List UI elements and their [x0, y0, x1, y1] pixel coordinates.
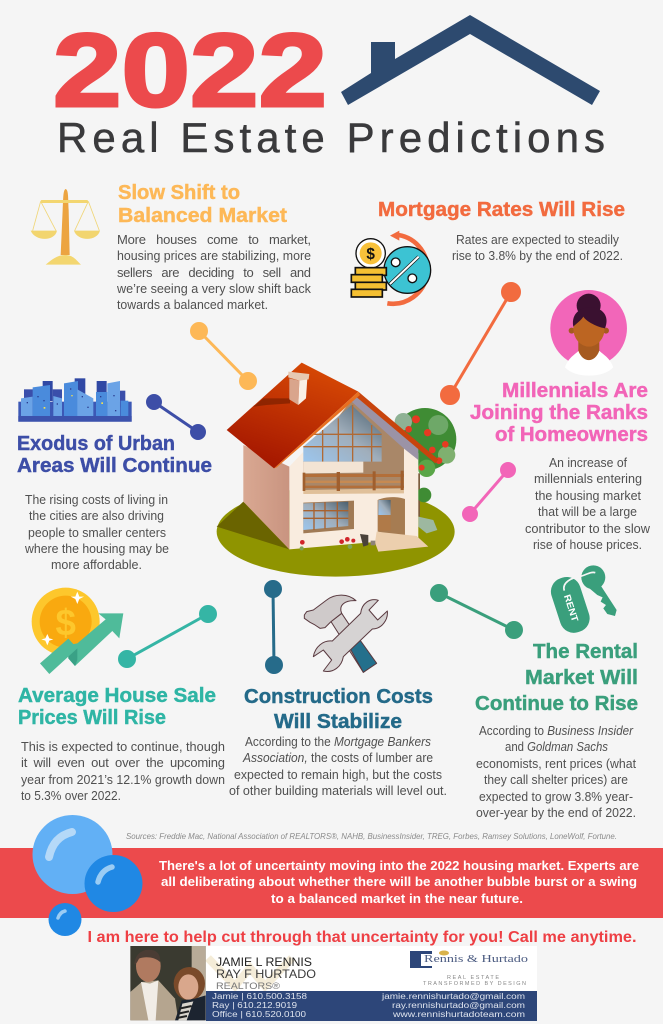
heading: Continue to Rise: [475, 692, 638, 715]
heading: Prices Will Rise: [18, 706, 166, 729]
heading: Areas Will Continue: [17, 454, 212, 477]
connector: pink: [462, 462, 516, 522]
chimney: [288, 372, 309, 405]
icon: percent and coins: [351, 231, 431, 304]
logo: TRANSFORMED BY DESIGN: [423, 981, 526, 987]
watermark: [208, 958, 292, 986]
call to action: I am here to help cut through that uncertainty for you! Call me anytime.: [88, 929, 636, 946]
heading: The Rental: [533, 640, 638, 663]
phones: Jamie | 610.500.3158: [212, 992, 308, 1001]
panel: rental market: [475, 565, 638, 820]
panel: average house sale prices: [18, 588, 225, 803]
icon: bubbles: [32, 815, 142, 936]
body text: people to smaller centers: [28, 525, 166, 540]
heading: [470, 379, 648, 446]
body text: [21, 739, 225, 803]
phones: Ray | 610.212.9019: [212, 1001, 298, 1010]
agent names: [216, 955, 316, 992]
icon: percent and coins: $: [366, 246, 375, 263]
lawn: [217, 487, 455, 577]
body text: More houses come to market,: [117, 232, 311, 247]
logo: Rennis & Hurtado: [424, 953, 529, 965]
icon: rent key tag: [547, 565, 617, 636]
heading: Market Will: [525, 666, 638, 689]
logo: [410, 950, 529, 987]
banner text: to a balanced market in the near future.: [271, 892, 523, 906]
icon: coin and arrow: $: [55, 602, 76, 643]
heading: Will Stabilize: [274, 710, 402, 733]
banner text: [159, 859, 639, 906]
heading: Average House Sale: [18, 684, 216, 707]
red banner: [0, 848, 663, 918]
banner text: There's a lot of uncertainty moving into the 2022 housing market. Experts are: [159, 859, 639, 873]
connector: teal: [118, 606, 216, 668]
house shadow: [217, 502, 289, 549]
body text: rise to 3.8% by the end of 2022.: [452, 248, 623, 263]
illustration: house: [217, 363, 456, 577]
body text: more affordable.: [51, 557, 142, 572]
panel: construction costs: [229, 595, 447, 798]
tree: [394, 408, 456, 533]
lower window: [303, 501, 354, 533]
upper window: [303, 405, 382, 462]
flowers and cat: [300, 534, 375, 550]
agent names: REALTORS®: [216, 981, 280, 992]
body text: [452, 232, 623, 263]
heading: Slow Shift to: [118, 181, 240, 204]
body text: over-year by the end of 2022.: [476, 805, 636, 820]
body text: economists, rent prices (what: [476, 756, 636, 771]
heading: Millennials Are: [502, 379, 648, 402]
body text: The rising costs of living in: [25, 492, 168, 507]
body text: the cities are also driving: [29, 508, 164, 523]
emails and website: jamie.rennishurtado@gmail.com: [381, 992, 525, 1001]
connector: blue: [146, 394, 206, 440]
banner text: all deliberating about whether there will be another bubble burst or a swing: [161, 875, 637, 889]
heading: Mortgage Rates Will Rise: [378, 198, 625, 221]
panel: slow shift to balanced market: [31, 181, 311, 312]
balcony: [303, 471, 404, 494]
icon: woman avatar: [550, 290, 627, 376]
gable interior: [303, 400, 404, 490]
panel: exodus of urban areas: [17, 378, 212, 572]
icon: city skyline: [18, 378, 132, 422]
connector: green: [430, 584, 522, 638]
subtitle: Real Estate Predictions: [57, 114, 605, 161]
connector: orange: [440, 282, 520, 404]
emails and website: www.rennishurtadoteam.com: [392, 1010, 525, 1019]
body text: that will be a large: [538, 504, 637, 519]
heading: [18, 684, 216, 729]
body text: millennials entering: [534, 471, 642, 486]
panel: mortgage rates will rise: [351, 198, 625, 304]
body text: housing prices are stabilizing, more: [117, 248, 311, 263]
heading: [17, 432, 212, 477]
panel: millennials: [470, 379, 651, 552]
sources: Sources: Freddie Mac, National Association of REALTORS®, NAHB, BusinessInsider, TREG, Forbes, Ramsey Solutions, LoneWolf, Fortune.: [126, 831, 617, 841]
body text: An increase of: [549, 455, 627, 470]
door recess: [375, 497, 428, 552]
roof: [227, 363, 358, 468]
body text: they call shelter prices) are: [484, 772, 628, 787]
phones: [212, 992, 308, 1019]
connector: dark teal: [264, 580, 282, 674]
heading: of Homeowners: [495, 423, 648, 446]
photo of agents: [130, 946, 206, 1020]
body text: [476, 723, 636, 820]
contact bar: [206, 991, 537, 1021]
title: 2022: 2022: [53, 13, 327, 129]
body text: Rates are expected to steadily: [456, 232, 619, 247]
body text: it will even out over the upcoming: [21, 755, 225, 770]
body text: This is expected to continue, though: [21, 739, 225, 754]
body text: [229, 734, 447, 798]
body text: the housing market: [535, 488, 641, 503]
body text: According to Business Insider: [479, 723, 634, 738]
heading: Balanced Market: [118, 204, 287, 227]
icon: hammer and wrench: [304, 595, 387, 672]
front wall: [289, 393, 418, 549]
body text: Association, the costs of lumber are: [242, 750, 433, 765]
left wall: [243, 445, 289, 549]
body text: expected to grow 3.8% year-: [479, 789, 633, 804]
body text: [116, 232, 311, 312]
connector: yellow: [190, 322, 256, 390]
heading: Exodus of Urban: [17, 432, 175, 455]
body text: we’re seeing a very slow shift back: [116, 281, 311, 296]
body text: expected to remain high, but the costs: [234, 767, 442, 782]
body text: of other building materials will level out.: [229, 783, 447, 798]
phones: Office | 610.520.0100: [212, 1010, 307, 1019]
body text: where the housing may be: [24, 541, 169, 556]
body text: [24, 492, 169, 572]
body text: According to the Mortgage Bankers: [245, 734, 431, 749]
heading: Construction Costs: [244, 685, 433, 708]
heading: [118, 181, 287, 227]
business card: [130, 946, 537, 1021]
body text: sellers are deciding to sell and: [117, 265, 311, 280]
heading: Joining the Ranks: [470, 401, 648, 424]
heading: [475, 640, 638, 715]
emails and website: ray.rennishurtado@gmail.com: [392, 1001, 525, 1010]
icon: balance scale: [31, 189, 100, 265]
agent names: RAY F HURTADO: [216, 967, 316, 981]
body text: and Goldman Sachs: [505, 739, 608, 754]
icon: roof outline: [341, 15, 600, 105]
heading: [244, 685, 433, 733]
body text: [525, 455, 651, 552]
icon: coin and arrow: [32, 588, 123, 674]
body text: year from 2021’s 12.1% growth down: [21, 772, 225, 787]
body text: towards a balanced market.: [117, 297, 268, 312]
icon: rent key tag: RENT: [562, 593, 580, 623]
body text: contributor to the slow: [525, 521, 651, 536]
body text: to 5.3% over 2022.: [21, 788, 121, 803]
body text: rise of house prices.: [533, 537, 642, 552]
logo: REAL ESTATE: [447, 975, 499, 981]
agent names: JAMIE L RENNIS: [216, 955, 312, 969]
emails and website: [381, 992, 525, 1019]
